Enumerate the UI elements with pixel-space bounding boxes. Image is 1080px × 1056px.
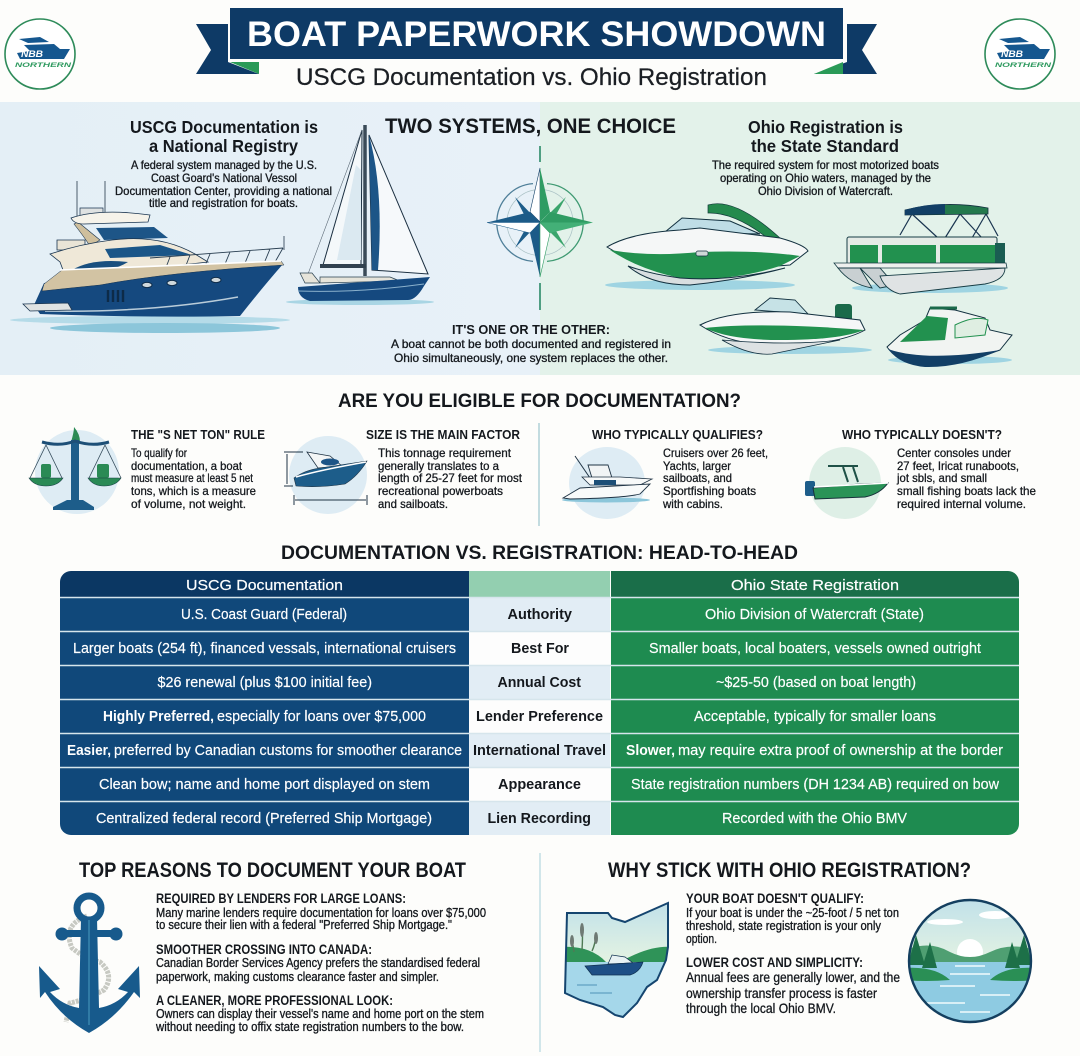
subtitle: USCG Documentation vs. Ohio Registration bbox=[296, 64, 767, 91]
icon: sport fishing boat bbox=[562, 447, 652, 519]
heading: two systems: TWO SYSTEMS, ONE CHOICE bbox=[385, 115, 676, 138]
heading: why Ohio: WHY STICK WITH OHIO REGISTRATION? bbox=[608, 858, 971, 882]
text block: USCG documentation: A federal system managed by the U.S. bbox=[131, 158, 317, 172]
text: who does not qualify bbox=[842, 428, 1036, 511]
row: international travel: preferred by Canadian customs for smoother clearance bbox=[114, 743, 462, 759]
text: who does not qualify: Center consoles under bbox=[897, 446, 1011, 460]
comparison table bbox=[60, 571, 1019, 835]
text: does not qualify: option. bbox=[686, 932, 717, 946]
illustration: runabout bbox=[605, 204, 808, 290]
text: size factor: recreational powerboats bbox=[378, 484, 503, 498]
text: lower cost: Annual fees are generally lower, and the bbox=[686, 969, 900, 985]
text block: one or the other: IT'S ONE OR THE OTHER: bbox=[452, 323, 610, 337]
row: lien recording: Lien Recording bbox=[488, 811, 591, 827]
column header: Ohio state registration: Ohio State Registration bbox=[731, 578, 899, 594]
text: size factor: SIZE IS THE MAIN FACTOR bbox=[366, 428, 520, 442]
text: who qualifies bbox=[592, 428, 768, 511]
text block: USCG documentation: Coast Goard's National Vessol bbox=[151, 171, 297, 185]
text: Canada crossing: Canadian Border Services Agency prefers the standardised federal bbox=[156, 956, 480, 970]
row: international travel: Slower, bbox=[626, 743, 675, 759]
logo: left bbox=[5, 19, 75, 89]
text: lenders: REQUIRED BY LENDERS FOR LARGE LOANS: bbox=[156, 891, 406, 906]
row: authority: U.S. Coast Guard (Federal) bbox=[181, 607, 347, 623]
icon: boat size bbox=[284, 436, 367, 514]
text block: Ohio registration: The required system for most motorized boats bbox=[712, 158, 939, 172]
text: who qualifies: WHO TYPICALLY QUALIFIES? bbox=[592, 428, 763, 442]
text: who qualifies: Cruisers over 26 feet, bbox=[663, 446, 768, 460]
icon: balance scale bbox=[29, 427, 121, 514]
text: who qualifies: with cabins. bbox=[662, 497, 723, 511]
row: international travel bbox=[67, 743, 1003, 759]
row: authority: Ohio Division of Watercraft (State) bbox=[705, 607, 924, 623]
row: lender preference bbox=[103, 709, 936, 725]
text block: USCG documentation: Documentation Center, providing a national bbox=[115, 184, 332, 198]
text: size factor: length of 25-27 feet for most bbox=[378, 471, 523, 485]
logo: right bbox=[985, 19, 1055, 89]
text: size factor: generally translates to a bbox=[378, 459, 499, 473]
text: lower cost: LOWER COST AND SIMPLICITY: bbox=[686, 955, 863, 970]
text: 5 net ton rule bbox=[131, 428, 265, 511]
text: 5 net ton rule: documentation, a boat bbox=[131, 459, 243, 473]
row: appearance: Appearance bbox=[498, 777, 581, 793]
text: 5 net ton rule: of volume, not weight. bbox=[131, 497, 246, 511]
text: does not qualify: If your boat is under the ~25-foot / 5 net ton bbox=[686, 906, 899, 920]
icon: lake landscape bbox=[905, 895, 1035, 1022]
text: who does not qualify: 27 feet, Iricat runaboots, bbox=[897, 459, 1019, 473]
title banner: BOAT PAPERWORK SHOWDOWN bbox=[247, 15, 826, 54]
panel: Ohio registration reasons bbox=[560, 858, 1035, 1022]
row: annual cost: ~$25-50 (based on boat length) bbox=[716, 675, 916, 691]
text: cleaner look bbox=[155, 993, 484, 1034]
icon: compass rose bbox=[487, 146, 593, 310]
text block: one or the other: Ohio simultaneously, one system replaces the other. bbox=[394, 351, 668, 365]
text block: one or the other: A boat cannot be both documented and registered in bbox=[391, 337, 671, 351]
row: authority: Authority bbox=[508, 607, 572, 623]
row: authority bbox=[181, 607, 924, 623]
row: lender preference: Acceptable, typically for smaller loans bbox=[694, 709, 936, 725]
text: Canada crossing bbox=[156, 942, 480, 984]
row: appearance bbox=[99, 777, 1000, 793]
text: does not qualify bbox=[686, 891, 899, 946]
row: international travel: Easier, bbox=[67, 743, 111, 759]
text: cleaner look: without needing to offix state registration numbers to the bow. bbox=[155, 1020, 464, 1034]
heading: head-to-head: DOCUMENTATION VS. REGISTRATION: HEAD-TO-HEAD bbox=[281, 543, 798, 564]
text: Canada crossing: paperwork, making customs clearance faster and simpler. bbox=[156, 970, 439, 984]
text: 5 net ton rule: must measure at least 5 net bbox=[131, 471, 254, 485]
text: who qualifies: Yachts, larger bbox=[663, 459, 731, 473]
icon: Ohio map bbox=[564, 902, 669, 1018]
row: appearance: Clean bow; name and home port displayed on stem bbox=[99, 777, 430, 793]
column header: USCG documentation: USCG Documentation bbox=[186, 578, 343, 594]
text: cleaner look: Owners can display their vessel's name and home port on the stem bbox=[156, 1007, 484, 1021]
row: international travel: may require extra proof of ownership at the border bbox=[678, 743, 1003, 759]
logo: left: NBB bbox=[21, 49, 44, 59]
text: cleaner look: A CLEANER, MORE PROFESSIONAL LOOK: bbox=[156, 993, 393, 1008]
logo: right: NORTHERN bbox=[995, 62, 1051, 69]
logo: right: NBB bbox=[1001, 49, 1024, 59]
text: does not qualify: YOUR BOAT DOESN'T QUALIFY: bbox=[686, 891, 864, 906]
text: who qualifies: Sportfishing boats bbox=[663, 484, 756, 498]
text block: USCG documentation: USCG Documentation is bbox=[130, 117, 318, 137]
row: best for bbox=[73, 641, 981, 657]
text: lower cost bbox=[686, 955, 900, 1016]
text: size factor: and sailboats. bbox=[378, 497, 448, 511]
row: lender preference: Highly Preferred, bbox=[103, 709, 214, 725]
text block: Ohio registration bbox=[712, 117, 939, 198]
text: does not qualify: threshold, state registration is your only bbox=[686, 919, 882, 933]
heading: eligibility: ARE YOU ELIGIBLE FOR DOCUMENTATION? bbox=[338, 391, 741, 412]
row: annual cost: $26 renewal (plus $100 initial fee) bbox=[158, 675, 372, 691]
text: size factor bbox=[366, 428, 523, 511]
row: appearance: State registration numbers (DH 1234 AB) required on bow bbox=[631, 777, 1000, 793]
text: 5 net ton rule: To qualify for bbox=[131, 446, 187, 460]
row: best for: Best For bbox=[511, 641, 569, 657]
illustration: personal watercraft bbox=[887, 308, 1012, 367]
illustration: sailboat bbox=[286, 125, 434, 305]
row: annual cost: Annual Cost bbox=[498, 675, 581, 691]
row: best for: Larger boats (254 ft), financed vessals, international cruisers bbox=[73, 641, 456, 657]
row: lender preference: especially for loans over $75,000 bbox=[217, 709, 426, 725]
row: international travel: International Travel bbox=[473, 743, 606, 759]
panel: two systems bbox=[0, 102, 1080, 375]
row: best for: Smaller boats, local boaters, vessels owned outright bbox=[649, 641, 981, 657]
row: lien recording: Centralized federal record (Preferred Ship Mortgage) bbox=[96, 811, 432, 827]
text: who does not qualify: WHO TYPICALLY DOESN'T? bbox=[842, 428, 1002, 442]
text: who qualifies: sailboats, and bbox=[663, 471, 732, 485]
text block: USCG documentation bbox=[115, 117, 332, 210]
text block: Ohio registration: the State Standard bbox=[751, 136, 899, 156]
panel: eligibility bbox=[29, 423, 1036, 526]
illustration: motor yacht bbox=[10, 181, 290, 333]
text block: Ohio registration: Ohio Registration is bbox=[748, 117, 903, 137]
panel: reasons to document bbox=[39, 858, 486, 1034]
row: lien recording: Recorded with the Ohio BMV bbox=[722, 811, 907, 827]
icon: center console boat bbox=[805, 447, 888, 519]
row: annual cost bbox=[158, 675, 916, 691]
text block: Ohio registration: Ohio Division of Watercraft. bbox=[758, 184, 893, 198]
text: lower cost: through the local Ohio BMV. bbox=[686, 1000, 836, 1016]
text block: USCG documentation: a National Registry bbox=[149, 136, 298, 156]
logo: left: NORTHERN bbox=[15, 62, 71, 69]
text: size factor: This tonnage requirement bbox=[378, 446, 512, 460]
text: lower cost: ownership transfer process is faster bbox=[686, 985, 877, 1001]
text: Canada crossing: SMOOTHER CROSSING INTO CANADA: bbox=[156, 942, 372, 957]
title banner bbox=[196, 8, 877, 74]
text block: one or the other bbox=[391, 323, 671, 365]
text: 5 net ton rule: THE "S NET TON" RULE bbox=[131, 428, 265, 442]
text: lenders bbox=[156, 891, 486, 932]
text: 5 net ton rule: tons, which is a measure bbox=[131, 484, 256, 498]
row: lender preference: Lender Preference bbox=[476, 709, 603, 725]
text block: USCG documentation: title and registration for boats. bbox=[149, 196, 298, 210]
text: lenders: to secure their lien with a federal "Preferred Ship Mortgage." bbox=[156, 918, 452, 932]
text block: Ohio registration: operating on Ohio waters, managed by the bbox=[720, 171, 931, 185]
text: lenders: Many marine lenders require documentation for loans over $75,000 bbox=[156, 906, 486, 920]
illustration: bowrider bbox=[700, 298, 872, 354]
illustration: pontoon boat bbox=[834, 204, 1008, 294]
row: lien recording bbox=[96, 811, 907, 827]
heading: top reasons: TOP REASONS TO DOCUMENT YOUR BOAT bbox=[79, 858, 466, 882]
text: who does not qualify: required internal volume. bbox=[897, 497, 1026, 511]
text: who does not qualify: small fishing boats lack the bbox=[897, 484, 1036, 498]
text: who does not qualify: jot sbls, and small bbox=[896, 471, 987, 485]
icon: anchor bbox=[39, 896, 140, 1033]
